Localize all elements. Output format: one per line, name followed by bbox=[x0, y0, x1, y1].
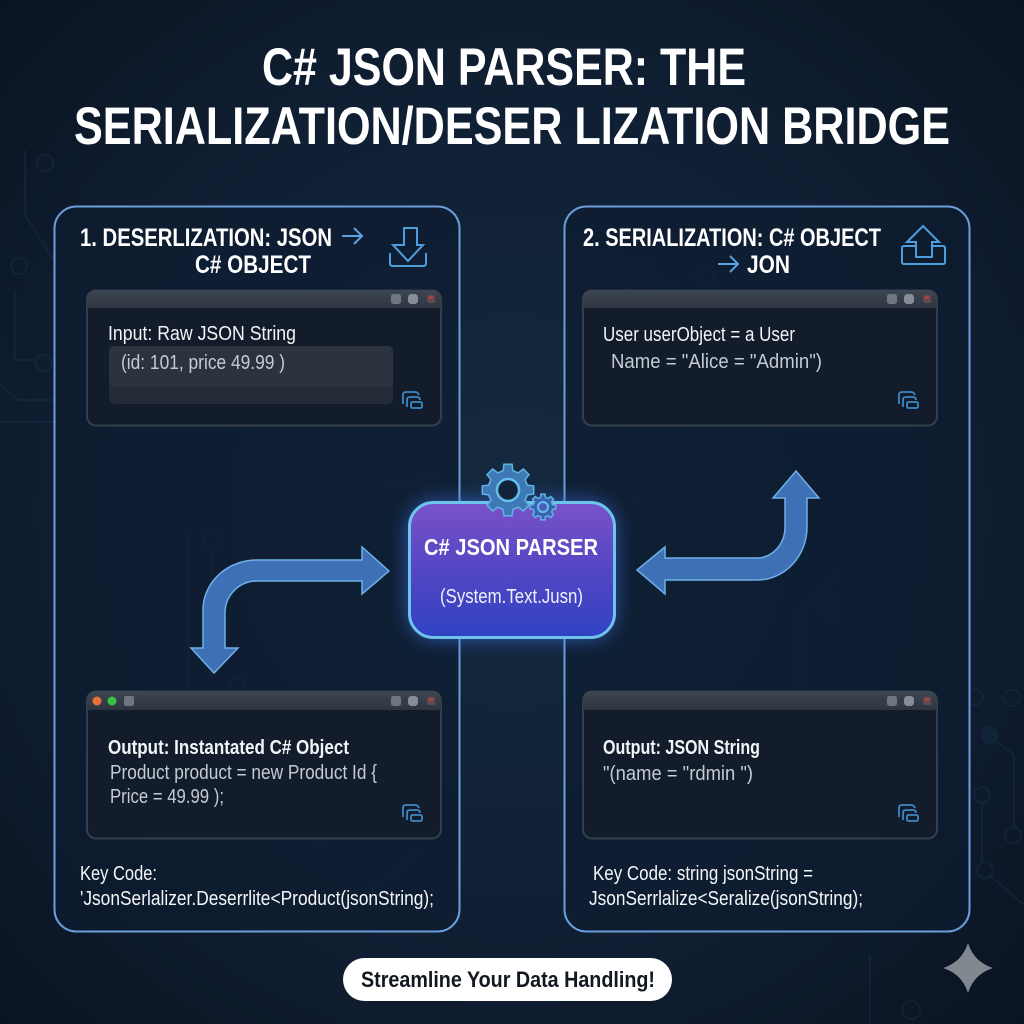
icon: download bbox=[390, 228, 426, 266]
icon: upload bbox=[902, 226, 945, 264]
parser hub: C# JSON PARSER bbox=[424, 534, 598, 560]
window: user object: Name = "Alice = "Admin") bbox=[611, 351, 822, 373]
key code: Key Code: bbox=[80, 863, 157, 885]
title: C# JSON PARSER: THE bbox=[262, 38, 746, 97]
arrow: hub to deserialization output bbox=[191, 547, 389, 673]
panel: serialization bbox=[564, 206, 970, 932]
window: output json bbox=[583, 691, 937, 838]
key code: 'JsonSerlalizer.Deserrlite<Product(jsonString); bbox=[80, 888, 434, 910]
window: input bbox=[87, 290, 441, 426]
icon: gears bbox=[482, 464, 556, 520]
window: user object: User userObject = a User bbox=[603, 324, 795, 346]
title bbox=[74, 38, 950, 156]
panel heading: serialization: JON bbox=[747, 251, 790, 279]
panel heading: deserialization bbox=[80, 224, 362, 279]
icon: sparkle bbox=[943, 943, 993, 993]
panel heading: serialization bbox=[583, 224, 881, 279]
window: user object bbox=[583, 290, 937, 426]
key code: JsonSerrlalize<Seralize(jsonString); bbox=[589, 888, 863, 910]
window: output: Product product = new Product Id { bbox=[110, 762, 377, 784]
window: output json: "(name = "rdmin ") bbox=[603, 763, 753, 785]
window: output: Output: Instantated C# Object bbox=[108, 737, 349, 759]
window: output bbox=[87, 691, 441, 838]
panel heading: deserialization: 1. DESERLIZATION: JSON bbox=[80, 224, 332, 252]
window: output json: Output: JSON String bbox=[603, 737, 760, 759]
panel: deserialization bbox=[54, 206, 460, 932]
parser hub bbox=[409, 502, 614, 638]
call to action: Streamline Your Data Handling! bbox=[361, 967, 655, 992]
arrow: hub to serialization input bbox=[637, 471, 819, 594]
code box: (id: 101, price 49.99 ) bbox=[121, 352, 285, 374]
key code: Key Code: string jsonString = bbox=[593, 863, 813, 885]
panel heading: deserialization: C# OBJECT bbox=[195, 251, 311, 279]
window: input: Input: Raw JSON String bbox=[108, 323, 296, 345]
parser hub: (System.Text.Jusn) bbox=[440, 586, 583, 608]
window: output: Price = 49.99 ); bbox=[110, 786, 224, 808]
key code bbox=[589, 863, 863, 910]
panel heading: serialization: 2. SERIALIZATION: C# OBJECT bbox=[583, 224, 881, 252]
key code bbox=[80, 863, 434, 910]
code box bbox=[109, 346, 393, 404]
call to action bbox=[343, 958, 672, 1001]
